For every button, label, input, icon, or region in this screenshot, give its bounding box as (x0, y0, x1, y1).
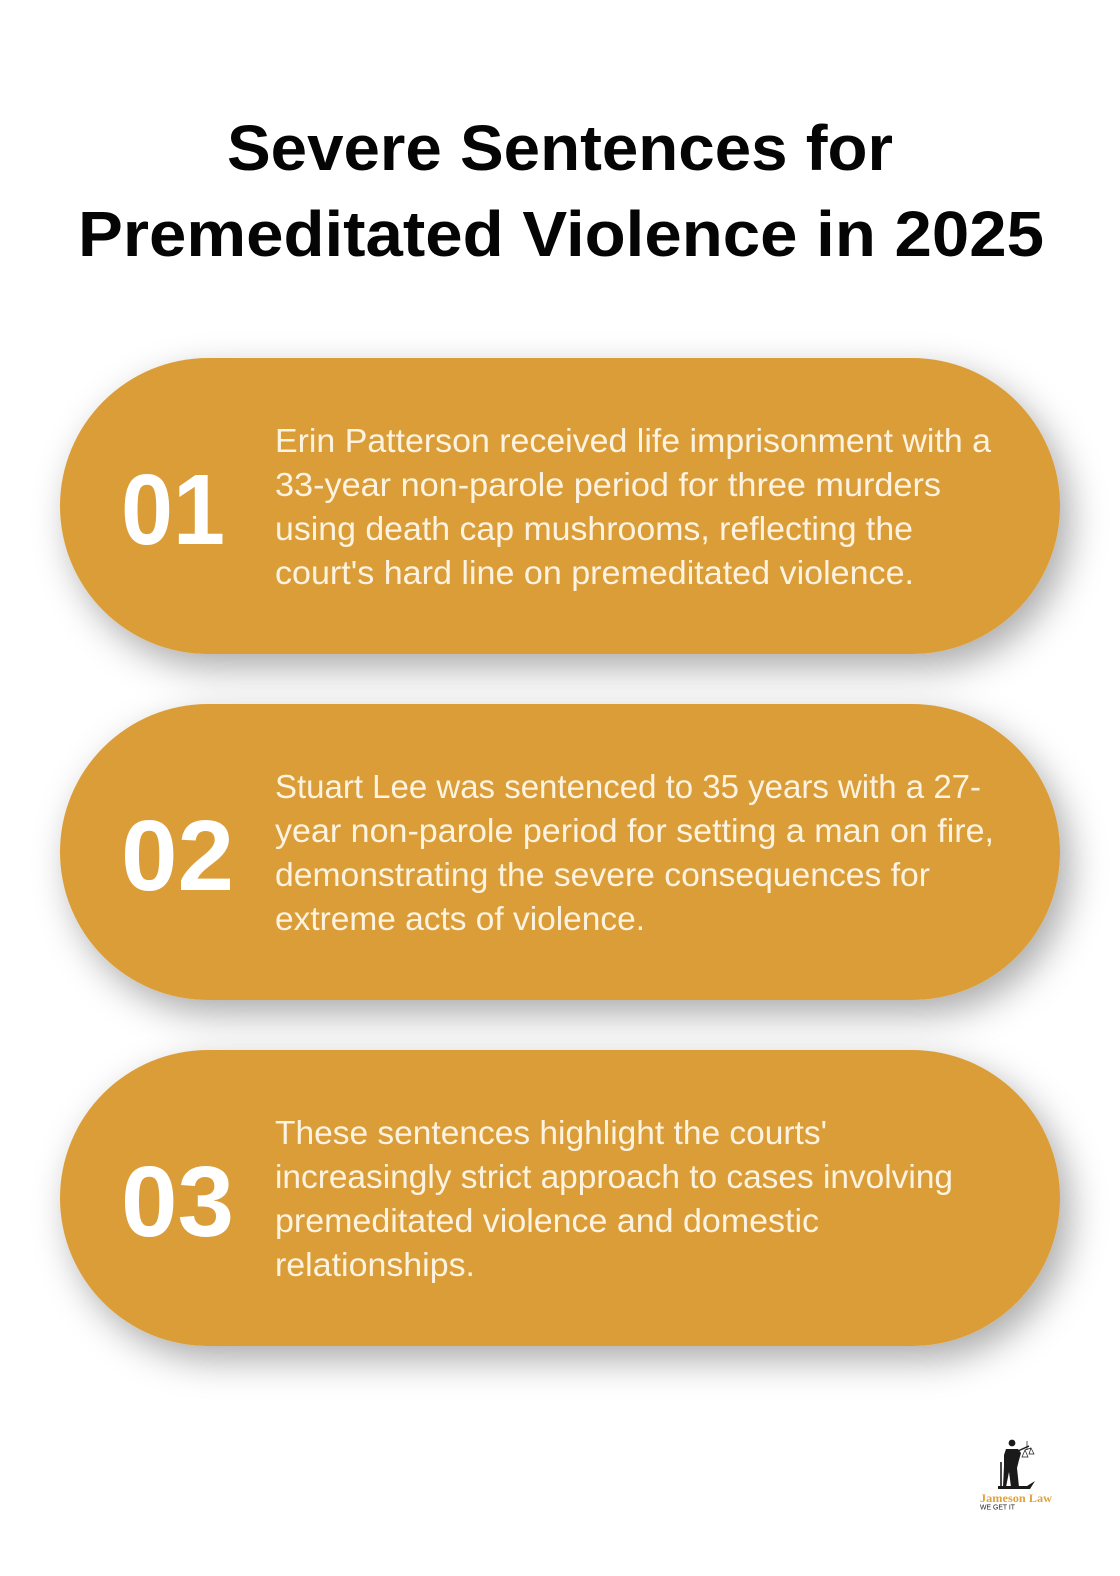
card 02 number: 02 (121, 800, 234, 912)
card 02 text: Stuart Lee was sentenced to 35 years with a 27- (275, 768, 981, 805)
title (78, 112, 1044, 270)
card 01 number: 01 (121, 454, 225, 566)
icon: lady justice (998, 1440, 1035, 1489)
card 02 background pill (60, 704, 1060, 1000)
card 01 text: Erin Patterson received life imprisonment with a (275, 422, 992, 459)
card 02 text: extreme acts of violence. (275, 900, 645, 937)
card 03 text (275, 1114, 953, 1283)
card 03 text: These sentences highlight the courts' (275, 1114, 827, 1151)
card 01 text (275, 422, 992, 591)
card 03 background pill (60, 1050, 1060, 1346)
panel: card 02 (60, 704, 1060, 1000)
card 02 text: demonstrating the severe consequences for (275, 856, 930, 893)
card 03 text: relationships. (275, 1246, 475, 1283)
card 01 text: court's hard line on premeditated violence. (275, 554, 914, 591)
card 03 number: 03 (121, 1146, 234, 1258)
panel: card 03 (60, 1050, 1060, 1346)
card 03 text: premeditated violence and domestic (275, 1202, 819, 1239)
logo: Jameson Law (980, 1440, 1053, 1512)
logo wordmark: Jameson Law (980, 1493, 1053, 1505)
title: Severe Sentences for (227, 112, 893, 184)
card 02 text: year non-parole period for setting a man on fire, (275, 812, 994, 849)
card 01 text: using death cap mushrooms, reflecting the (275, 510, 913, 547)
card 01 text: 33-year non-parole period for three murders (275, 466, 941, 503)
panel: card 01 (60, 358, 1060, 654)
card 03 text: increasingly strict approach to cases involving (275, 1158, 953, 1195)
card 01 background pill (60, 358, 1060, 654)
title: Premeditated Violence in 2025 (78, 198, 1044, 270)
logo tagline: WE GET IT (980, 1504, 1016, 1512)
card 02 text (275, 768, 994, 937)
